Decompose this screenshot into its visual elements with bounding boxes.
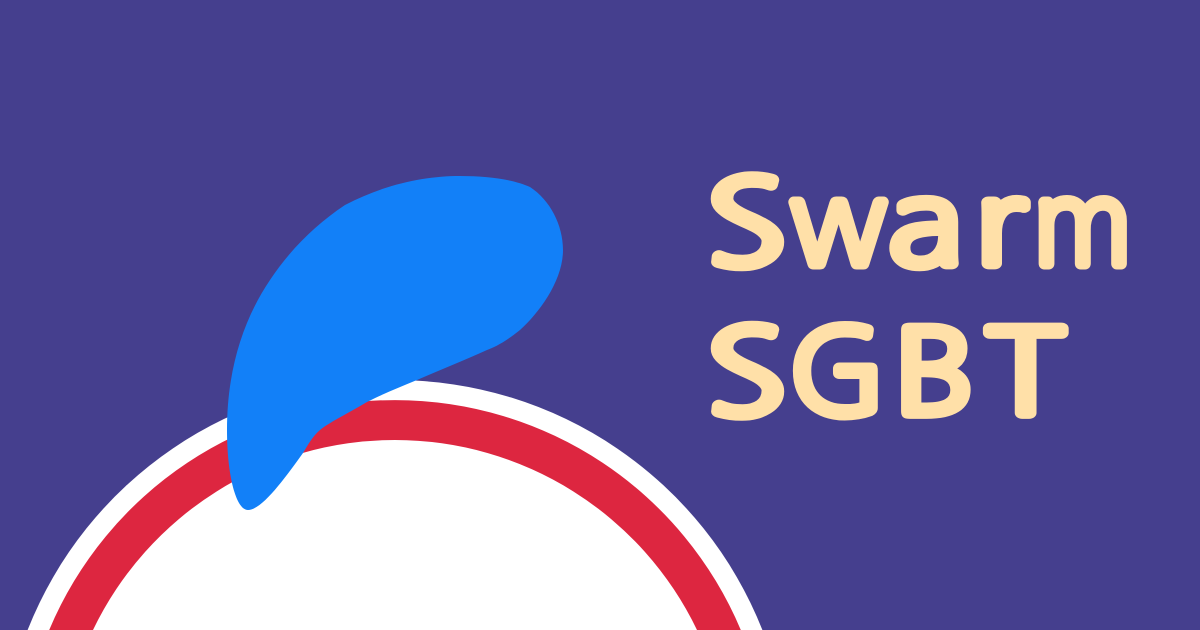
title line: SGBT: G xyxy=(788,314,886,432)
title line: Swarm: r xyxy=(974,164,1026,282)
title line: Swarm: m xyxy=(1032,164,1132,282)
title line: Swarm: w xyxy=(790,164,886,282)
title line: Swarm: a xyxy=(888,164,964,282)
title line: Swarm: S xyxy=(706,164,787,282)
title line: SGBT: S xyxy=(706,314,787,432)
title line: SGBT: B xyxy=(894,314,976,432)
white circle with red ring xyxy=(28,380,762,630)
title xyxy=(706,164,1132,432)
title line: SGBT: T xyxy=(986,314,1064,432)
blue blob xyxy=(227,176,563,510)
